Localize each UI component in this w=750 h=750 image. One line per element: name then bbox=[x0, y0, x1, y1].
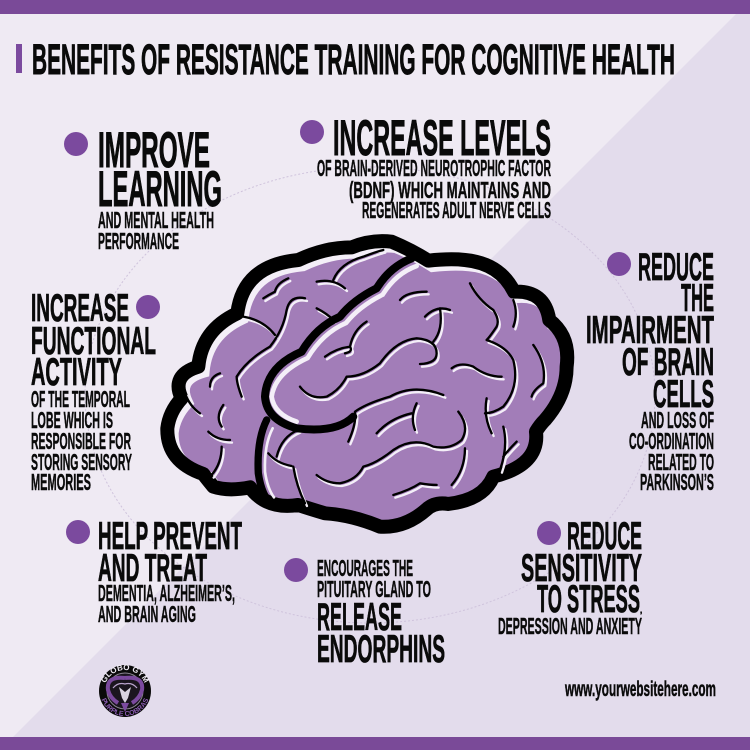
benefit: increase levels of BDNF: (BDNF) WHICH MAINTAINS AND bbox=[349, 177, 551, 203]
logo: purple cobras: PURPLE COBRAS bbox=[102, 698, 148, 716]
benefit: increase functional activity: ACTIVITY bbox=[31, 351, 122, 394]
top bar bbox=[0, 0, 750, 14]
benefit: reduce impairment of brain cells bbox=[586, 246, 714, 495]
bottom bar bbox=[0, 737, 750, 750]
text: DEMENTIA, ALZHEIMER’S, bbox=[98, 580, 235, 606]
benefit: improve learning: IMPROVE bbox=[98, 122, 210, 178]
benefit: increase levels of BDNF bbox=[300, 110, 551, 223]
brain illustration bbox=[167, 241, 572, 531]
benefit: reduce sensitivity to stress: , bbox=[640, 606, 642, 615]
text: LEARNING bbox=[98, 161, 222, 217]
benefit: increase functional activity bbox=[31, 287, 160, 495]
benefit: release endorphins: ENCOURAGES THE bbox=[317, 555, 413, 581]
benefit: increase functional activity: STORING SENSORY bbox=[31, 449, 132, 475]
benefit: improve learning bbox=[64, 122, 222, 254]
benefit: release endorphins: PITUITARY GLAND TO bbox=[317, 576, 431, 602]
benefit: improve learning: AND MENTAL HEALTH bbox=[98, 207, 214, 233]
benefit: help prevent and treat bbox=[66, 515, 242, 627]
benefit: increase functional activity: FUNCTIONAL bbox=[31, 320, 156, 363]
benefit: increase functional activity: MEMORIES bbox=[31, 469, 91, 495]
logo: purple cobras bbox=[99, 664, 151, 717]
benefit: increase functional activity: RESPONSIBLE FOR bbox=[31, 428, 131, 454]
benefit: increase functional activity: INCREASE bbox=[31, 287, 129, 330]
text: HELP PREVENT bbox=[98, 515, 242, 558]
benefit: improve learning: PERFORMANCE bbox=[98, 228, 179, 254]
benefit: help prevent and treat: AND BRAIN AGING bbox=[98, 601, 196, 627]
text: ENDORPHINS bbox=[317, 628, 445, 671]
benefit: increase functional activity: LOBE WHICH IS bbox=[31, 407, 113, 433]
benefit: help prevent and treat: AND TREAT bbox=[98, 547, 207, 590]
logo: purple cobras: GLOBO GYM bbox=[102, 664, 149, 683]
benefit: reduce sensitivity to stress bbox=[498, 515, 642, 639]
benefit: increase functional activity: OF THE TEMPORAL bbox=[31, 386, 130, 412]
benefit: release endorphins: RELEASE bbox=[317, 596, 402, 639]
text: REDUCE bbox=[567, 515, 642, 558]
benefit: release endorphins bbox=[284, 555, 445, 671]
